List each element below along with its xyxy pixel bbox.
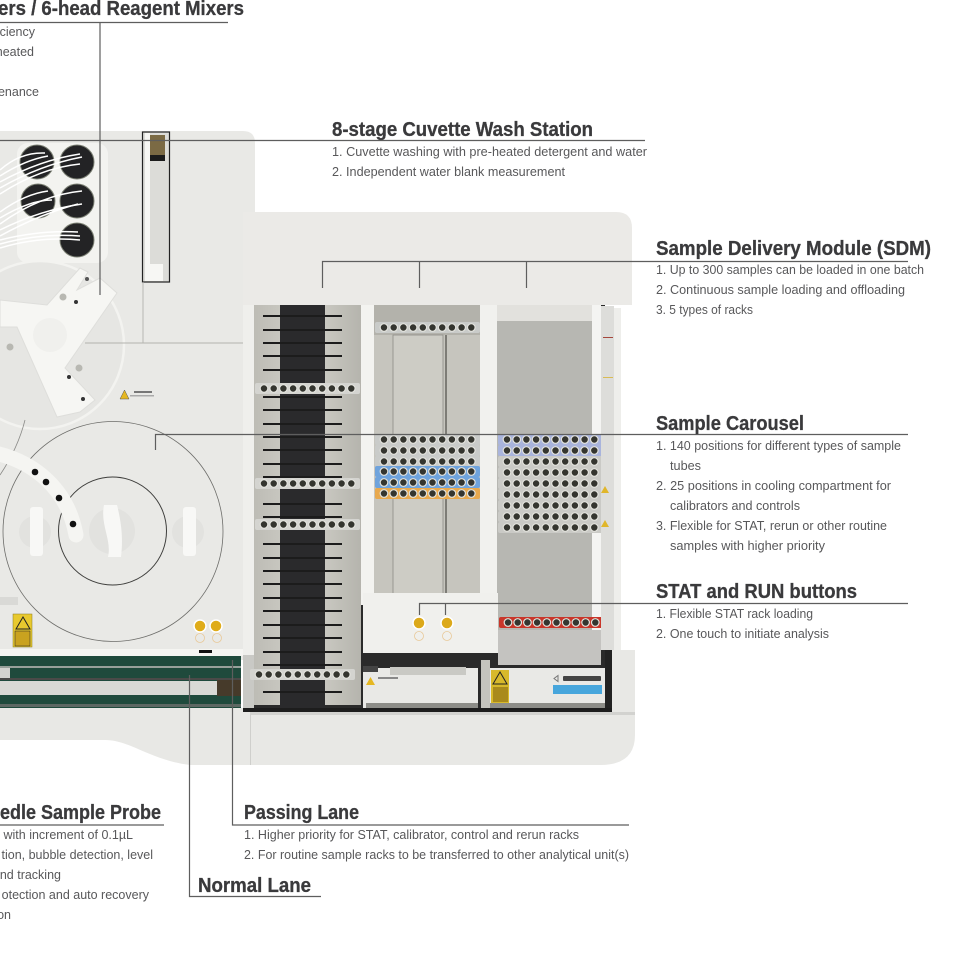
panel: sample carousel <box>0 422 223 642</box>
panel: left drawer <box>363 666 478 710</box>
middle column racks <box>375 322 480 499</box>
icon: transfer arc <box>0 453 76 535</box>
callout: sample delivery module: 1. Up to 300 samples can be loaded in one batch <box>656 263 924 277</box>
panel: sample lane interior <box>243 305 621 712</box>
caution label <box>491 670 509 703</box>
callout: sample delivery module: Sample Delivery Module (SDM) <box>656 238 931 260</box>
analyzer machine <box>0 131 635 765</box>
callout: reagent mixers: ciency <box>0 25 36 39</box>
caution text mark <box>0 597 18 605</box>
callout: STAT and RUN buttons: 1. Flexible STAT rack loading <box>656 607 813 621</box>
left column racks <box>250 383 360 680</box>
callout: sample carousel <box>156 413 908 553</box>
callout: sample carousel: calibrators and controls <box>670 499 800 513</box>
laser caution label <box>13 614 32 647</box>
callout: passing lane: 1. Higher priority for STAT, calibrator, control and rerun racks <box>244 828 579 842</box>
callout: STAT and RUN buttons <box>420 581 908 641</box>
panel: bottom base <box>0 650 635 765</box>
callout: cuvette wash station: 1. Cuvette washing with pre-heated detergent and water <box>332 145 647 159</box>
black conveyor strip <box>280 305 325 708</box>
direction label <box>553 685 602 694</box>
callout: needle sample probe: with increment of 0.1µL <box>2 828 133 842</box>
callout: sample carousel: 1. 140 positions for different types of sample <box>656 439 901 453</box>
callout: STAT and RUN buttons: STAT and RUN buttons <box>656 581 857 603</box>
callout: passing lane: Passing Lane <box>244 802 359 824</box>
rack loading arrow <box>563 676 601 681</box>
callout: sample carousel: 3. Flexible for STAT, rerun or other routine <box>656 519 887 533</box>
callout: sample carousel: tubes <box>670 459 701 473</box>
callout: sample delivery module: 2. Continuous sample loading and offloading <box>656 283 905 297</box>
callout: cuvette wash station <box>0 119 647 179</box>
callout: sample carousel: Sample Carousel <box>656 413 804 435</box>
callout: needle sample probe: otection and auto recovery <box>2 888 150 902</box>
callout: needle sample probe <box>0 802 164 922</box>
callout: normal lane: Normal Lane <box>198 875 311 897</box>
panel: right pillar <box>601 306 621 650</box>
icon: mixer arm <box>0 268 117 417</box>
icon: reagent bottles <box>20 145 94 257</box>
panel: SDM lid <box>243 212 632 305</box>
callout: sample carousel: 2. 25 positions in cooling compartment for <box>656 479 891 493</box>
callout: passing lane <box>232 660 629 862</box>
callout: sample delivery module <box>322 238 931 317</box>
warning label <box>120 390 154 399</box>
callout: sample delivery module: 3. 5 types of racks <box>656 303 753 317</box>
rack fins <box>263 315 342 693</box>
callout: sample carousel: samples with higher priority <box>670 539 826 553</box>
callout: STAT and RUN buttons: 2. One touch to initiate analysis <box>656 627 829 641</box>
panel: right drawer <box>490 668 605 710</box>
callout: normal lane <box>190 675 321 897</box>
callout: cuvette wash station: 8-stage Cuvette Wash Station <box>332 119 593 141</box>
callout: cuvette wash station: 2. Independent water blank measurement <box>332 165 566 179</box>
icon: reagent disc <box>0 261 124 475</box>
panel: reagent bottle tray <box>0 143 108 263</box>
right column racks <box>498 434 604 628</box>
icon: in and out buttons <box>194 620 222 642</box>
callout: passing lane: 2. For routine sample racks to be transferred to other analytical unit(s) <box>244 848 629 862</box>
callout: needle sample probe: edle Sample Probe <box>0 802 161 824</box>
callout: needle sample probe: nd tracking <box>0 868 61 882</box>
reagent tubes <box>0 153 82 248</box>
panel: upper body <box>0 131 255 660</box>
panel: green lanes <box>0 656 241 708</box>
icon: carousel knobs <box>19 505 204 557</box>
panel: STAT and RUN box <box>363 593 498 653</box>
callout: needle sample probe: tion, bubble detection, level <box>2 848 153 862</box>
panel: cuvette wash slot <box>142 132 170 282</box>
callout: reagent mixers <box>0 0 244 295</box>
